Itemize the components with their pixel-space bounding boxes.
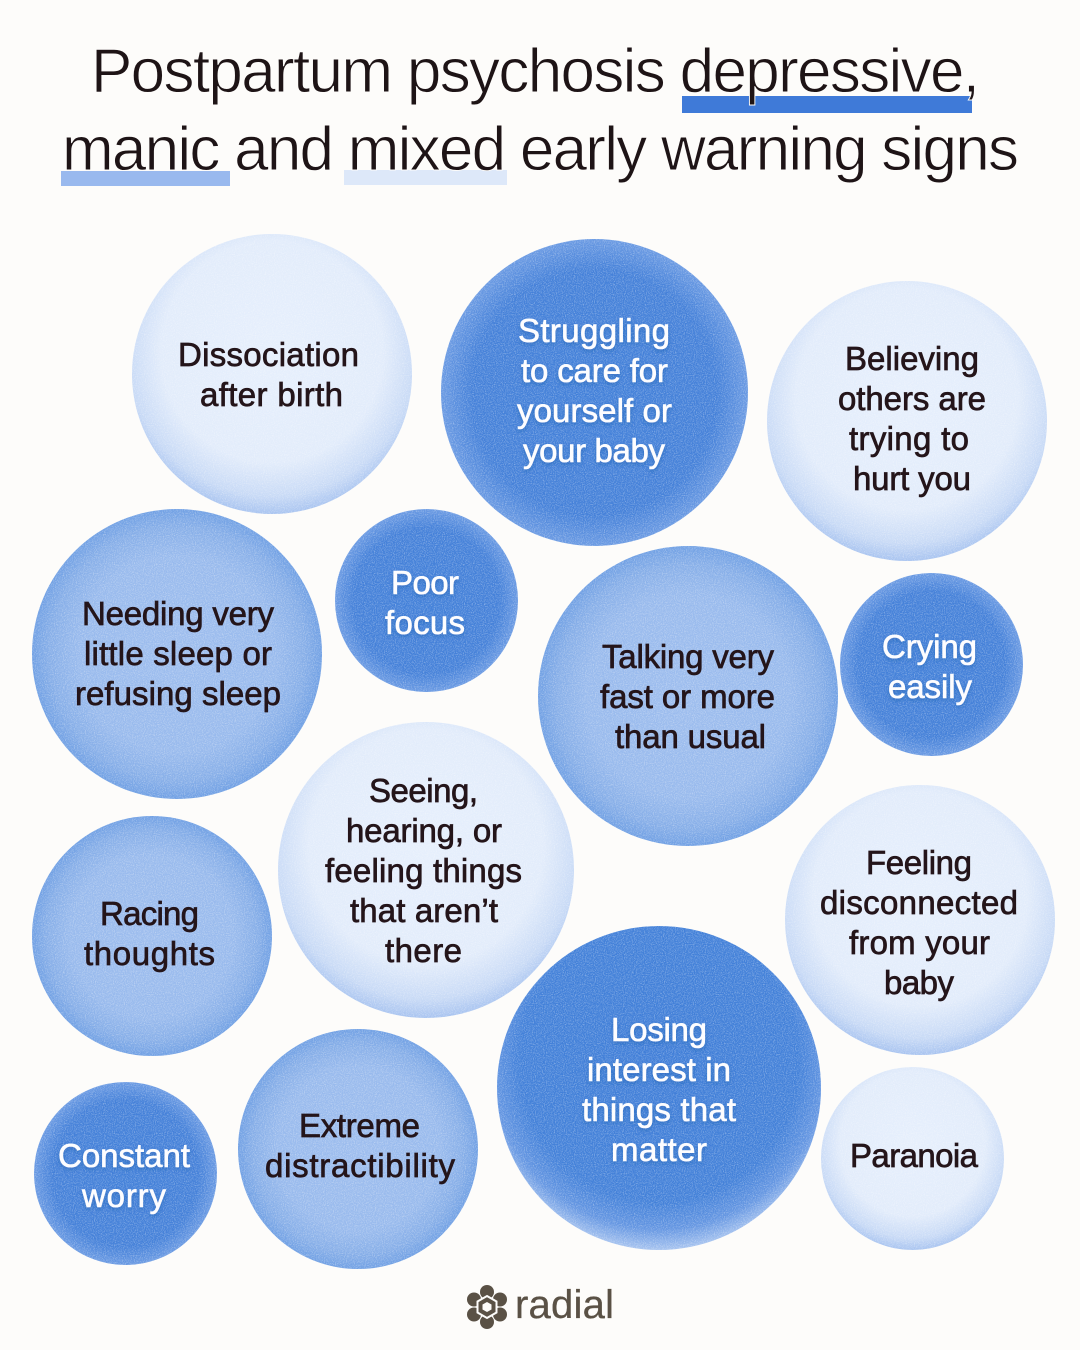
bubble: Talking very fast or more than usual: than usual: [615, 718, 766, 755]
bubble: Talking very fast or more than usual: fast or more: [600, 678, 775, 715]
bubble: Paranoia: [821, 1067, 1004, 1250]
bubble: Struggling to care for yourself or your baby: yourself or: [517, 392, 672, 429]
bubble: Struggling to care for yourself or your baby: your baby: [523, 432, 666, 469]
bubble: Believing others are trying to hurt you: [767, 281, 1047, 561]
title: [61, 37, 1019, 186]
bubble: Feeling disconnected from your baby: [785, 785, 1055, 1055]
bubble: Losing interest in things that matter: matter: [611, 1131, 707, 1168]
bubble: Losing interest in things that matter: [497, 926, 821, 1250]
bubble: Racing thoughts: Racing: [100, 895, 199, 932]
icon: radial flower: [467, 1285, 507, 1329]
bubble: Talking very fast or more than usual: [538, 546, 838, 846]
bubble: Struggling to care for yourself or your baby: Struggling: [518, 312, 670, 349]
highlight: manic: [61, 171, 230, 186]
bubble: Dissociation after birth: after birth: [200, 376, 343, 413]
bubble: Seeing, hearing, or feeling things that aren't there: that aren’t: [350, 892, 498, 929]
bubble: Constant worry: [34, 1082, 217, 1265]
bubble: Feeling disconnected from your baby: Feeling: [866, 844, 972, 881]
title line 2: manic and mixed early warning signs: [62, 115, 1019, 184]
bubble: Seeing, hearing, or feeling things that aren't there: [278, 722, 574, 1018]
bubble: Paranoia: Paranoia: [850, 1137, 979, 1174]
bubble: Seeing, hearing, or feeling things that aren't there: feeling things: [325, 852, 522, 889]
bubble: Extreme distractibility: Extreme: [299, 1107, 420, 1144]
bubble: Needing very little sleep or refusing sleep: Needing very: [82, 595, 274, 632]
bubble: Struggling to care for yourself or your baby: [441, 239, 748, 546]
bubble: Poor focus: [335, 509, 518, 692]
bubble: Feeling disconnected from your baby: baby: [884, 964, 954, 1001]
bubble: Crying easily: easily: [888, 668, 972, 705]
bubble: Extreme distractibility: distractibility: [265, 1147, 456, 1184]
bubble: Needing very little sleep or refusing sleep: refusing sleep: [75, 675, 281, 712]
title line 1: Postpartum psychosis depressive,: [91, 37, 980, 106]
bubble: Dissociation after birth: Dissociation: [178, 336, 359, 373]
bubble: Extreme distractibility: [238, 1029, 478, 1269]
bubble: Believing others are trying to hurt you: others are: [838, 380, 986, 417]
bubble: Seeing, hearing, or feeling things that aren't there: hearing, or: [346, 812, 502, 849]
bubble: Believing others are trying to hurt you: trying to: [849, 420, 969, 457]
bubble: Struggling to care for yourself or your baby: to care for: [521, 352, 668, 389]
bubble: Constant worry: worry: [81, 1177, 166, 1214]
bubble: Seeing, hearing, or feeling things that aren't there: there: [385, 932, 462, 969]
highlight: depressive: [682, 96, 972, 113]
logo: radial: [467, 1283, 614, 1329]
bubble: Talking very fast or more than usual: Talking very: [602, 638, 774, 675]
bubble: Racing thoughts: thoughts: [84, 935, 215, 972]
bubble: Losing interest in things that matter: Losing: [611, 1011, 707, 1048]
bubble: Needing very little sleep or refusing sleep: little sleep or: [84, 635, 272, 672]
highlight: mixed: [344, 170, 507, 185]
bubble: Racing thoughts: [32, 816, 272, 1056]
bubble: Dissociation after birth: [132, 234, 412, 514]
bubble: Feeling disconnected from your baby: disconnected: [820, 884, 1018, 921]
bubble: Crying easily: Crying: [882, 628, 977, 665]
bubble: Constant worry: Constant: [58, 1137, 190, 1174]
bubble: Believing others are trying to hurt you: hurt you: [853, 460, 971, 497]
bubble: Feeling disconnected from your baby: from your: [849, 924, 990, 961]
bubble: Losing interest in things that matter: interest in: [587, 1051, 731, 1088]
bubble: Losing interest in things that matter: things that: [582, 1091, 736, 1128]
bubble: Believing others are trying to hurt you: Believing: [845, 340, 979, 377]
bubble: Needing very little sleep or refusing sleep: [32, 509, 322, 799]
bubble: Crying easily: [840, 573, 1023, 756]
wordmark: radial: [515, 1283, 614, 1327]
bubble: Poor focus: Poor: [391, 564, 459, 601]
bubble: Poor focus: focus: [385, 604, 465, 641]
bubble: Seeing, hearing, or feeling things that aren't there: Seeing,: [369, 772, 478, 809]
